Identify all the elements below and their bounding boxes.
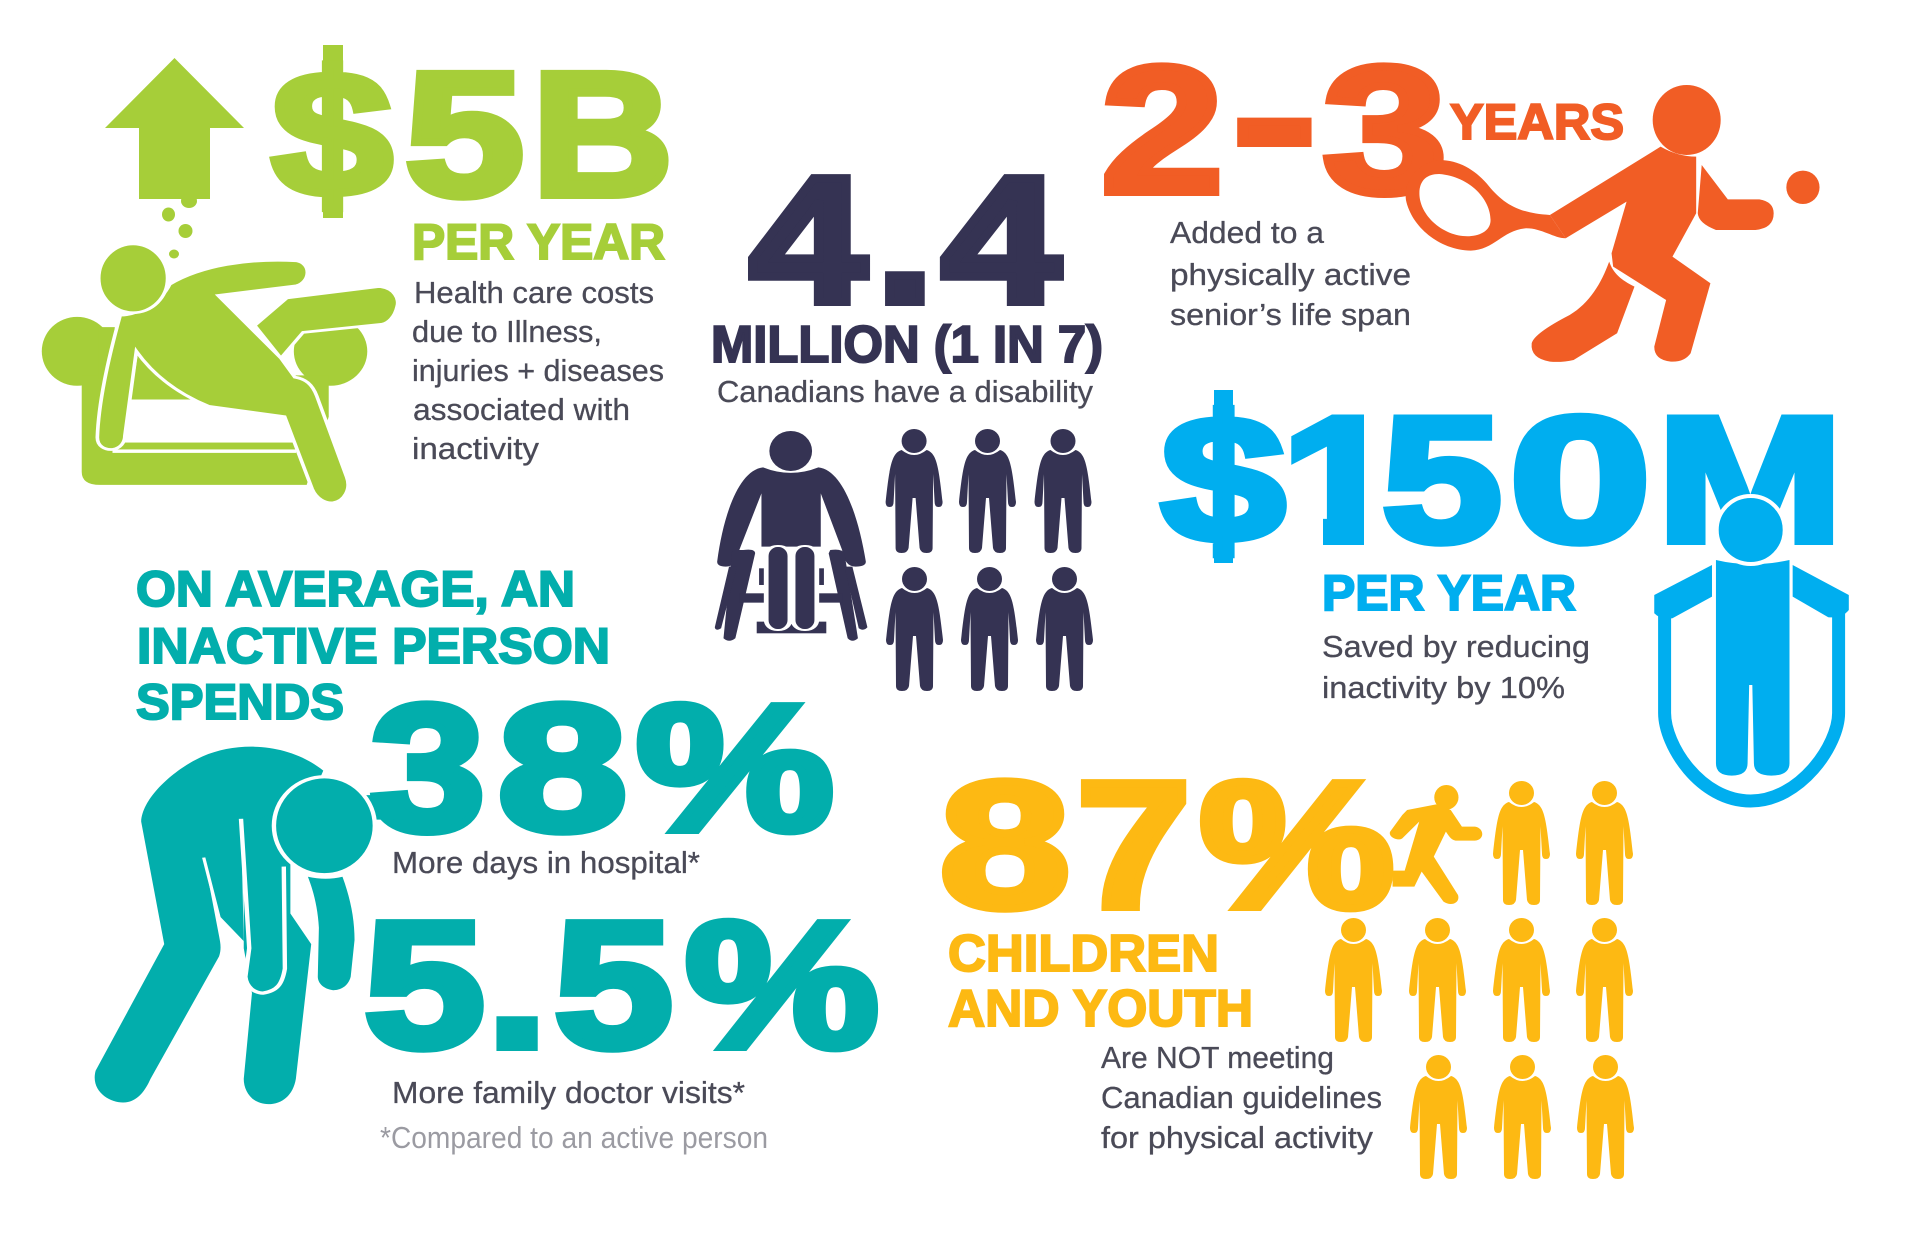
heading: per year: PER YEAR [1322,565,1576,621]
text: health care costs [412,275,664,466]
icon: person slumped in armchair [42,244,398,503]
text: are not meeting guidelines: Are NOT meeting [1101,1040,1334,1075]
icon: hunched tired person [95,747,355,1104]
text: saved by reducing inactivity: inactivity by 10% [1322,670,1565,705]
text: are not meeting guidelines: for physical activity [1101,1120,1374,1155]
big number: 87%: 7 [1077,745,1191,946]
heading: children and youth: AND YOUTH [948,980,1253,1038]
panel: $5B health care costs [42,37,673,503]
heading: on average an inactive person spends: INACTIVE PERSON [137,618,610,674]
text: health care costs: injuries + diseases [412,353,664,388]
big number: 2-3: - [1233,17,1316,218]
text: health care costs: due to Illness, [412,314,602,349]
big number: 38%: % [636,668,834,869]
icon: running person [1390,785,1482,904]
text: saved by reducing inactivity [1322,629,1590,705]
big number: $5B [272,37,673,233]
text: added to a senior's life span: Added to a [1170,215,1325,250]
panel: inactive person spends [95,561,879,1104]
icon: tennis player [1406,85,1820,362]
panel: $150M saved [1161,380,1849,801]
text: added to a senior's life span [1170,215,1411,332]
big number: 4.4 [750,140,1060,341]
big number: 87%: % [1199,745,1394,946]
heading: on average an inactive person spends: ON AVERAGE, AN [136,561,575,617]
text: added to a senior's life span: senior’s life span [1170,297,1411,332]
heading: children and youth: CHILDREN [948,925,1219,983]
icon: up arrow [105,58,244,258]
heading: on average an inactive person spends [136,561,610,730]
big number: $150M: 1 [1281,380,1401,579]
heading: per year: PER YEAR [412,214,665,270]
big number: 4.4: 4 [750,140,866,341]
big number: 5.5%: 5 [364,885,485,1086]
big number: $5B: $ [272,37,392,233]
text: added to a senior's life span: physically active [1170,257,1411,292]
icon group: standing people [1325,781,1634,1179]
big number: 4.4: 4 [941,140,1060,341]
big number: 5.5% [364,885,879,1086]
big number: 2-3: 3 [1323,30,1447,231]
text: health care costs: inactivity [412,431,540,466]
big number: 2-3: 2 [1101,30,1223,231]
heading: years: YEARS [1450,94,1624,150]
icon: head of hunched person [274,777,403,875]
big number: 38%: 3 [370,668,485,869]
big number: $5B: 5 [405,37,524,233]
text: saved by reducing inactivity: Saved by reducing [1322,629,1590,664]
panel: 2-3 years [1101,17,1820,362]
big number: $150M: 0 [1510,380,1651,579]
text: more family doctor visits: More family doctor visits* [392,1075,745,1110]
icon group: six standing people [886,429,1093,691]
text: health care costs: Health care costs [414,275,654,310]
panel: 87% children and youth [940,745,1634,1179]
big number: 87% [940,745,1394,946]
heading: children and youth [948,925,1253,1038]
heading: million 1 in 7: MILLION (1 IN 7) [711,316,1103,374]
big number: 87%: 8 [940,745,1070,946]
big number: $150M [1158,390,1834,563]
big number: 38% [370,668,834,869]
icon: person in wheelchair [715,431,867,641]
icon: person skipping rope [1654,496,1849,801]
text: are not meeting guidelines: Canadian guidelines [1101,1080,1382,1115]
panel: 4.4 million disability [711,140,1103,691]
text: health care costs: associated with [413,392,630,427]
big number: $150M: M [1657,380,1843,579]
big number: 5.5%: . [486,885,548,1086]
big number: 5.5%: % [685,885,879,1086]
text: canadians have a disability: Canadians have a disability [717,374,1093,409]
text: more days in hospital: More days in hospital* [392,845,700,880]
big number: 38%: 8 [498,668,627,869]
heading: on average an inactive person spends: SPENDS [136,674,344,730]
big number: 2-3 [1101,17,1447,231]
footnote: compared to an active person: *Compared to an active person [380,1120,768,1155]
big number: 5.5%: 5 [554,885,673,1086]
big number: $5B: B [532,37,673,233]
big number: $150M: $ [1161,380,1285,579]
text: are not meeting guidelines [1101,1040,1382,1155]
big number: 4.4: . [875,140,935,341]
icon: tennis ball [1786,171,1820,204]
big number: $150M: 5 [1382,380,1502,579]
